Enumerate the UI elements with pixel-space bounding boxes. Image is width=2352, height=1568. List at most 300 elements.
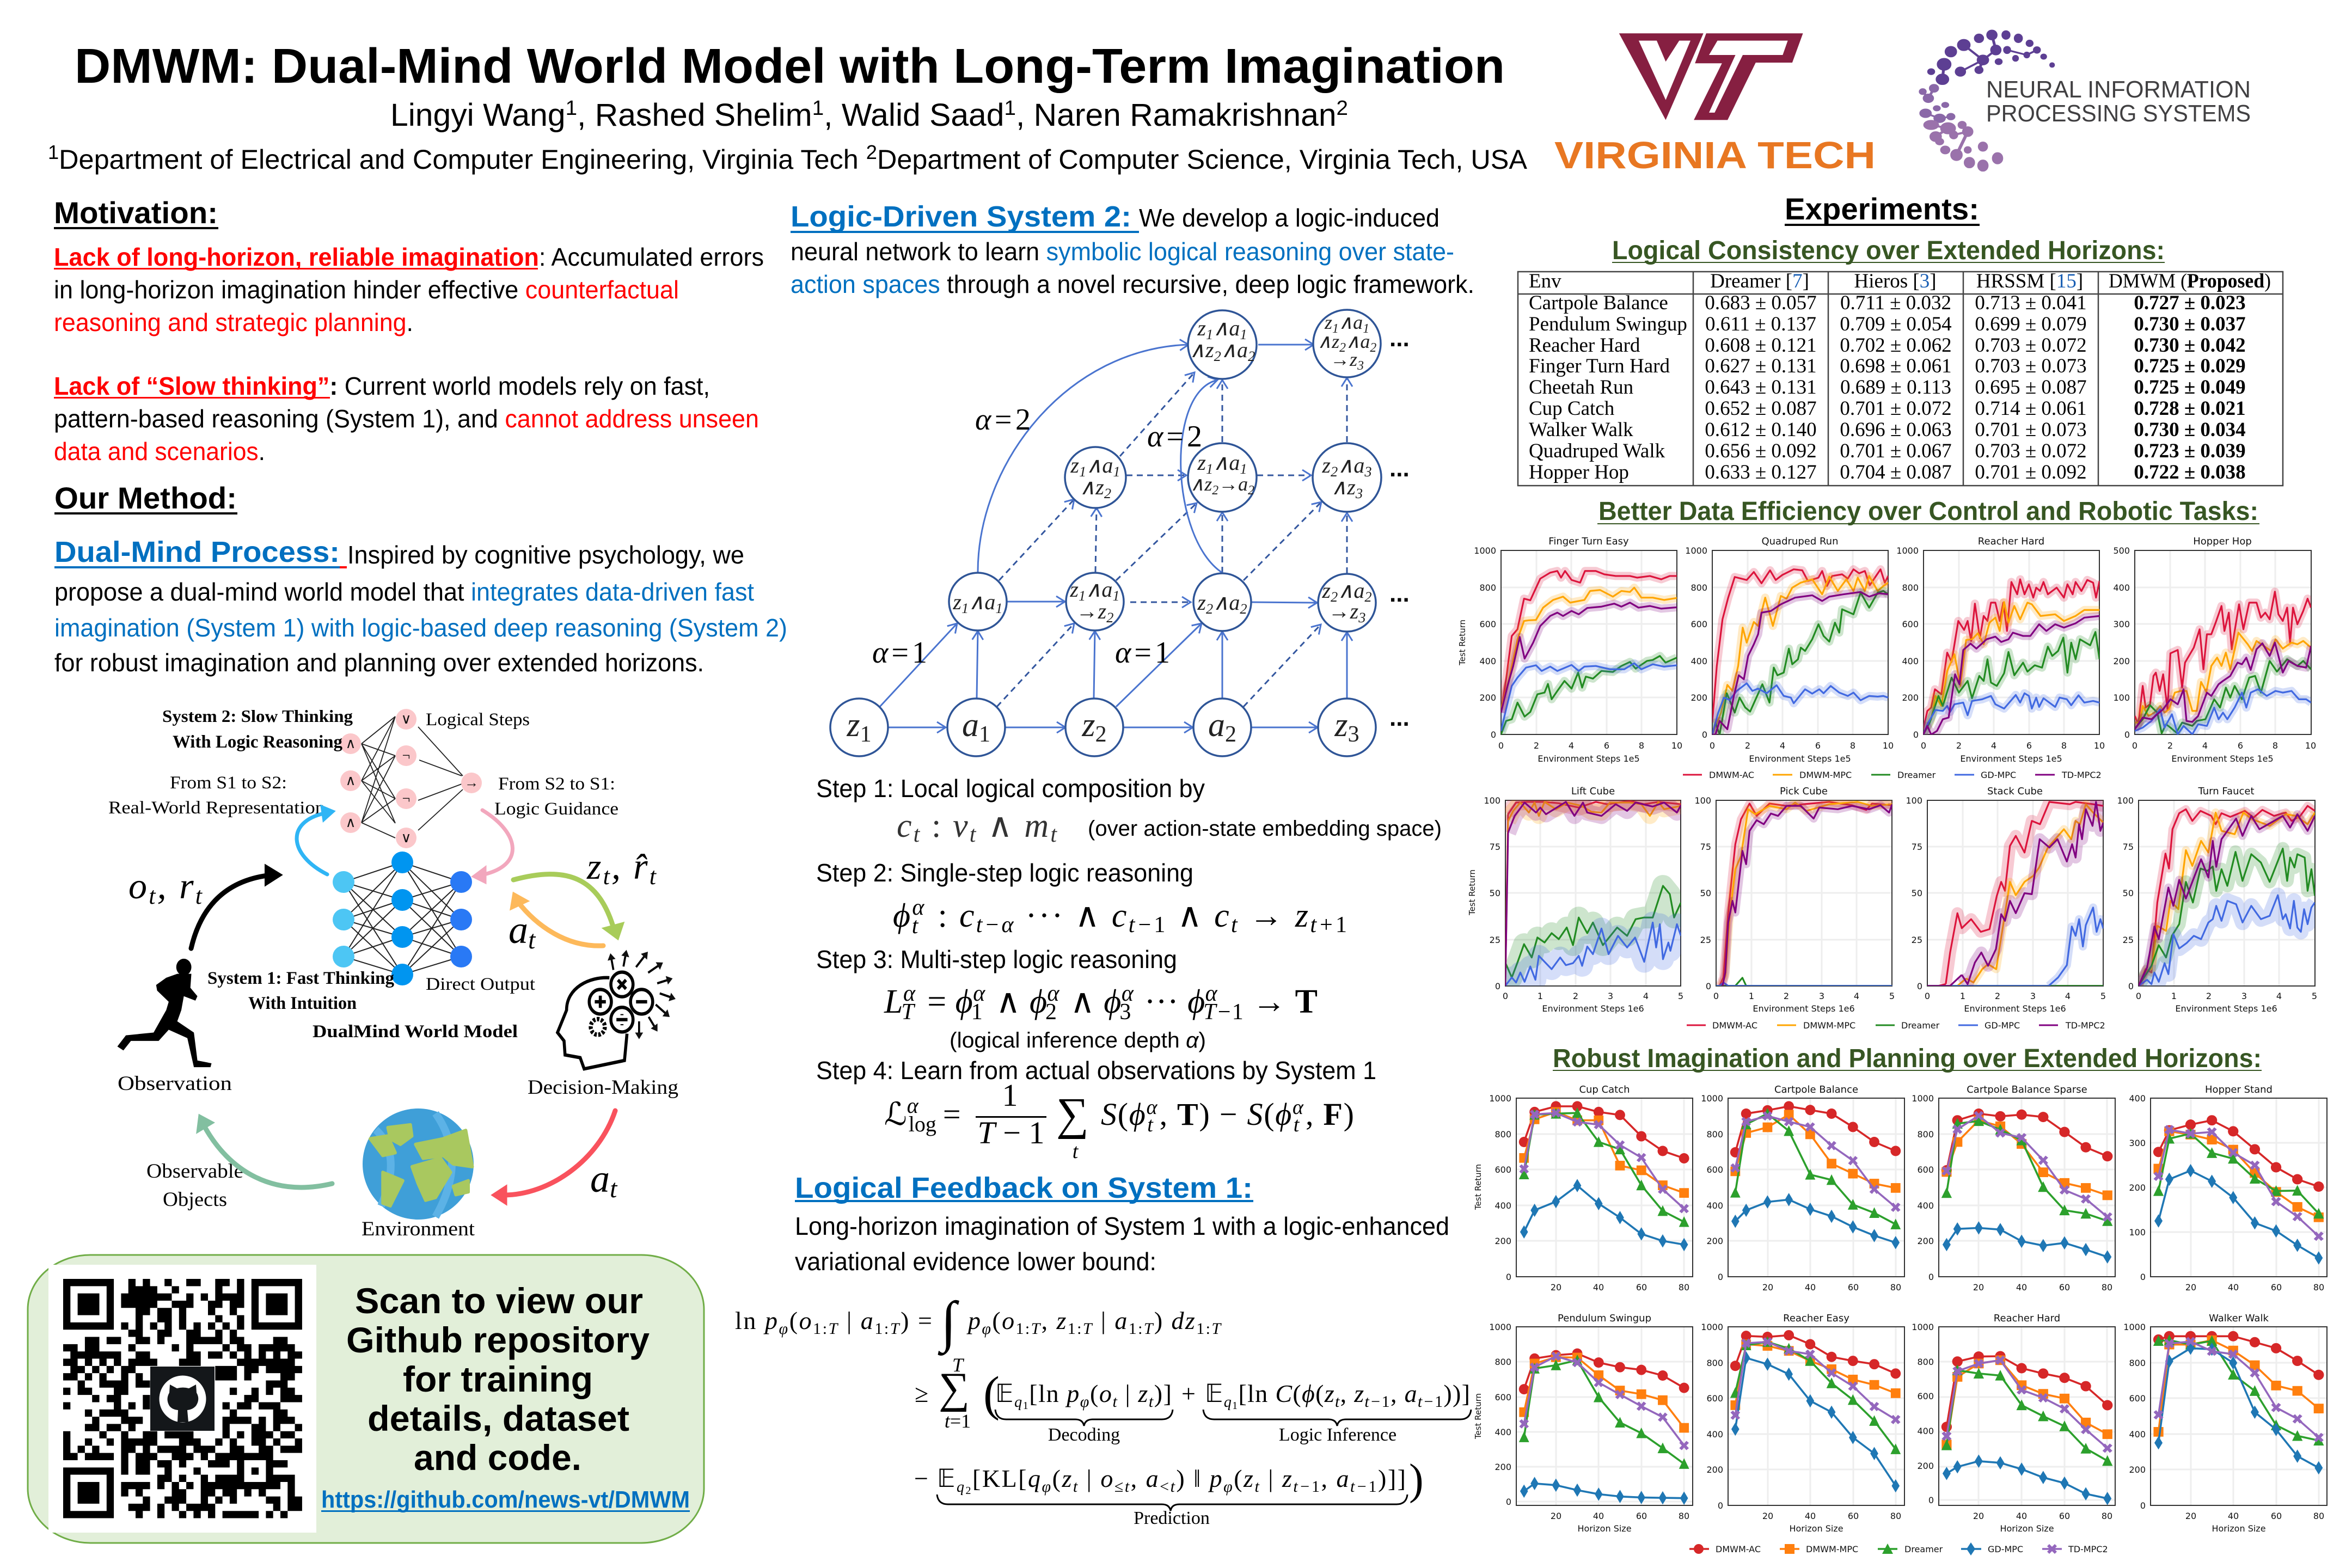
table: logical consistency results: Cheetah Run [1529,376,1633,399]
step 2: 1 [1154,912,1165,938]
step 2: 1 [1336,912,1347,938]
formula: evidence lower bound: | [1079,1465,1099,1492]
table: logical consistency results: 0.722 ± 0.038 [2134,461,2246,483]
chart: Pendulum Swingup: 60 [1636,1511,1647,1521]
chart: Cartpole Balance: 400 [1706,1200,1723,1211]
node labels: z [1322,453,1331,477]
chart: Cup Catch: Cup Catch [1579,1084,1630,1095]
chart: Pick Cube: 4 [1854,991,1859,1001]
chart: Walker Walk: 40 [2228,1511,2239,1521]
formula: evidence lower bound: 1:T [874,1320,899,1338]
table: logical consistency results: 0.723 ± 0.039 [2134,440,2246,462]
formula: evidence lower bound: ( [1090,1380,1098,1407]
authors: 1 [566,97,577,120]
chart: Lift Cube: 25 [1490,935,1500,945]
table: logical consistency results: 0.730 ± 0.034 [2134,419,2246,441]
step 3: ··· [1136,983,1187,1020]
chart: Reacher Easy: Horizon Size [1789,1523,1843,1534]
formula: evidence lower bound: , [1340,1380,1353,1407]
legend: data efficiency, row 2: GD-MPC [1984,1020,2020,1031]
chart: Reacher Easy: 60 [1848,1511,1859,1521]
legend: data efficiency, row 2: DMWM-MPC [1803,1020,1855,1031]
formula: evidence lower bound: ( [1052,1465,1061,1492]
step 1: c [897,807,912,844]
chart: Cartpole Balance: 200 [1706,1236,1723,1246]
chart: Cup Catch: 1000 [1489,1093,1511,1104]
formula: evidence lower bound: q [1224,1394,1232,1411]
legend: horizon charts [1689,1542,2108,1555]
chart: Stack Cube: 0 [1925,991,1930,1001]
formula: evidence lower bound: z [1243,1465,1253,1492]
step 2: t−α [976,912,1014,938]
text block: lack of slow thinking: pattern-based reasoning (System 1), and cannot address unseen [54,405,759,433]
chart: Cartpole Balance Sparse: 40 [2016,1282,2027,1293]
diagram labels: DualMind World Model [313,1022,518,1042]
chart: Reacher Hard (data efficiency): 200 [1902,693,1919,703]
logic network: ¬ [402,791,410,806]
logic network [340,709,482,848]
legend: data efficiency, row 1: GD-MPC [1981,770,2016,780]
callout text: Scan to view our [355,1281,643,1321]
formula: evidence lower bound: [KL[ [972,1465,1027,1492]
node labels: 2 [1331,463,1338,480]
chart: Cartpole Balance Sparse: 80 [2102,1282,2112,1293]
chart: Hopper Hop: 100 [2113,693,2130,703]
heading: Experiments: Experiments: [1785,192,1979,226]
node labels: →a [1218,473,1248,495]
diagram: dual-mind world model loop [108,706,678,1240]
node labels: 2 [1364,589,1372,605]
chart: Stack Cube: Environment Steps 1e6 [1964,1003,2066,1014]
logo: Virginia Tech: VIRGINIA TECH [1554,134,1876,176]
chart: Finger Turn Easy [1474,536,1682,764]
chart: Cartpole Balance Sparse: 60 [2059,1282,2070,1293]
legend: horizon charts: DMWM-AC [1716,1544,1761,1554]
table: logical consistency results: 0.730 ± 0.042 [2134,334,2246,357]
step 3: T [901,1000,915,1025]
chart: Stack Cube: 100 [1906,795,1922,806]
chart: Finger Turn Easy: 1000 [1474,546,1496,556]
text block: feedback description [795,1212,1449,1276]
chart: Reacher Hard (horizon): 1000 [1912,1322,1934,1332]
chart: Quadruped Run: 10 [1883,740,1894,751]
formula: evidence lower bound: t− [1364,1393,1381,1411]
alpha labels: α=1 [1115,636,1170,670]
chart: Reacher Easy: 20 [1762,1511,1773,1521]
step 4: t [1294,1113,1300,1136]
node labels: ∧z [1190,473,1212,495]
chart: Quadruped Run: 4 [1780,740,1785,751]
heading: Robust Imagination: Robust Imagination and Planning over Extended Horizons: [1553,1044,2262,1073]
chart: Pick Cube [1694,786,1895,1014]
table: logical consistency results: Finger Turn Hard [1529,355,1670,377]
authors: 1 [1004,97,1016,120]
chart: Reacher Hard (horizon): Reacher Hard [1994,1313,2060,1324]
chart: Pick Cube: 1 [1749,991,1754,1001]
diagram labels: Observable [146,1160,243,1183]
text block: lack of slow thinking: data and scenarios. [54,437,265,465]
step 2: ϕ [893,897,910,934]
formula: evidence lower bound: ln p [735,1307,777,1334]
chart: Reacher Hard (horizon) [1912,1313,2115,1534]
chart: Pick Cube: 75 [1700,842,1711,852]
chart: Hopper Hop: 10 [2305,740,2316,751]
chart: Cup Catch: 20 [1551,1282,1561,1293]
formula: evidence lower bound: dz [1172,1307,1195,1334]
node labels: 1 [979,722,990,747]
text block: feedback description: Long-horizon imagination of System 1 with a logic-enhanced [795,1212,1449,1240]
chart: Stack Cube: 3 [2030,991,2036,1001]
math labels: , r [157,865,194,906]
chart: Reacher Hard (horizon): 60 [2059,1511,2070,1521]
formula: evidence lower bound: 1:T [813,1320,837,1338]
node labels: 3 [1355,485,1363,501]
table: logical consistency results: 0.699 ± 0.079 [1975,313,2087,335]
chart: Quadruped Run: 6 [1815,740,1821,751]
chart: Hopper Stand: 60 [2271,1282,2282,1293]
text block: dual-mind description: Inspired by cognitive psychology, we [347,541,744,569]
chart: Pendulum Swingup: 40 [1593,1511,1604,1521]
node labels: ∧a [1213,590,1240,615]
chart: Hopper Stand: Hopper Stand [2205,1084,2273,1095]
icon: GitHub logo [150,1367,215,1431]
formula: evidence lower bound: )]] [1378,1465,1406,1492]
node labels: 1 [860,722,872,747]
step 1: t [1050,822,1057,847]
step 3: α [1205,981,1218,1006]
chart: Finger Turn Easy: 200 [1479,693,1496,703]
formula: evidence lower bound: a [1146,1465,1159,1492]
chart: Stack Cube [1906,786,2106,1014]
step 4: log [909,1112,936,1136]
chart: Quadruped Run: 400 [1690,656,1707,666]
graph nodes [830,310,1381,756]
icon: globe [363,1108,474,1220]
panel: logic-driven system 2 [735,200,1474,1528]
node labels: z [1197,450,1206,475]
table: logical consistency results: 0.695 ± 0.087 [1975,376,2087,399]
node labels: 3 [1348,722,1359,747]
chart: Reacher Hard (horizon): 400 [1917,1426,1934,1436]
node labels: 2 [1240,601,1247,617]
chart: Reacher Hard (data efficiency): 0 [1913,730,1919,740]
formula: evidence lower bound: ))] [1443,1380,1470,1407]
callout text: for training [403,1359,593,1399]
formula: evidence lower bound: z [1056,1307,1066,1334]
chart: Reacher Easy: Reacher Easy [1783,1313,1849,1324]
chart: Hopper Stand: 80 [2313,1282,2324,1293]
chart: Cup Catch: 80 [1679,1282,1689,1293]
chart: Stack Cube: 5 [2100,991,2106,1001]
legend: horizon charts: GD-MPC [1988,1544,2023,1554]
chart: Lift Cube: 100 [1484,795,1500,806]
step 4: ℒ [884,1097,907,1132]
node labels: 1 [1240,326,1247,342]
chart: Pendulum Swingup: 80 [1679,1511,1689,1521]
node labels: 1 [961,600,969,616]
step 3: = [918,983,955,1020]
chart: Cartpole Balance [1701,1084,1904,1293]
chart: Walker Walk: 800 [2129,1358,2146,1368]
callout text: details, dataset [367,1398,629,1438]
node labels: ∧a [1213,450,1240,475]
chart: Quadruped Run: 2 [1745,740,1750,751]
logo: Neural Information Processing Systems: NEURAL INFORMATION [1986,76,2251,103]
chart: Pendulum Swingup: 20 [1551,1511,1561,1521]
chart: Walker Walk: 600 [2129,1393,2146,1404]
step 2: → [1239,897,1294,934]
authors: Lingyi Wang [390,97,563,133]
text block: lack of slow thinking: Lack of “Slow thinking”: Current world models rely on fast, [54,372,710,400]
formula: evidence lower bound: 𝔼 [937,1465,955,1492]
formula: evidence lower bound: q [1028,1465,1040,1492]
legend: data efficiency, row 1: Dreamer [1897,770,1936,780]
chart: Walker Walk: 60 [2271,1511,2282,1521]
chart: Hopper Hop: 2 [2167,740,2173,751]
formula: evidence lower bound: , [1391,1380,1404,1407]
node labels: ∧a [1213,316,1240,340]
chart: Reacher Easy: 400 [1706,1429,1723,1440]
chart: Stack Cube: 75 [1912,842,1922,852]
chart: Finger Turn Easy: 800 [1479,583,1496,593]
formula: evidence lower bound: ≥ [915,1380,928,1407]
formula: evidence lower bound: , [1321,1465,1335,1492]
step 4: 1 [1002,1077,1018,1113]
node labels: 1 [1112,587,1120,604]
chart: Lift Cube: 0 [1503,991,1508,1001]
ellipsis markers: ... [1389,325,1410,352]
step 4: α [1293,1096,1304,1119]
logic network: ∧ [345,773,356,788]
diagram labels: Logical Steps [426,710,530,730]
text block: dual-mind description [54,541,787,677]
panel: our method [54,481,787,677]
chart: Lift Cube: 5 [1678,991,1683,1001]
chart: Pick Cube: 0 [1713,991,1719,1001]
step 4: α [907,1093,919,1118]
node labels: ∧a [1346,330,1370,352]
node labels: 2 [1248,348,1255,364]
formula: evidence lower bound: | [1260,1465,1281,1492]
chart: Cartpole Balance: 0 [1718,1272,1723,1282]
node labels: 1 [1113,463,1120,480]
chart: Hopper Hop: 6 [2238,740,2243,751]
chart: Reacher Easy: 40 [1805,1511,1816,1521]
table: logical consistency results: 0.704 ± 0.087 [1840,461,1952,483]
node labels: z [953,590,961,614]
axis label: test return, row 2: Test Return [1467,869,1477,916]
step 2: c [959,897,974,934]
node labels: ∧a [1338,578,1364,603]
chart: Pick Cube: 0 [1706,981,1711,991]
logic network: ∧ [345,814,356,830]
chart: Hopper Stand: 40 [2228,1282,2239,1293]
title: DMWM: Dual-Mind World Model with Long-Term Imagination [75,39,1505,94]
chart: Pendulum Swingup: 400 [1494,1427,1511,1437]
chart: Cartpole Balance: 80 [1890,1282,1901,1293]
formula: evidence lower bound: )] [1154,1380,1172,1407]
chart: Pendulum Swingup: Horizon Size [1577,1523,1632,1534]
diagram labels: With Intuition [248,994,357,1013]
node labels: 3 [1357,359,1364,373]
formula: evidence lower bound: [ln [1029,1380,1066,1407]
table: logical consistency results: 0.713 ± 0.041 [1975,292,2087,314]
chart: Stack Cube: Stack Cube [1987,786,2043,797]
chart: Turn Faucet: 1 [2171,991,2177,1001]
chart: Reacher Hard (data efficiency): 4 [1991,740,1996,751]
chart: Stack Cube: 0 [1917,981,1922,991]
node labels: →z [1076,599,1106,623]
chart: Reacher Hard (horizon): 40 [2016,1511,2027,1521]
callout text: Github repository [346,1320,650,1360]
chart: Reacher Hard (data efficiency): 10 [2094,740,2105,751]
math labels: a [590,1157,610,1200]
chart: Stack Cube: 4 [2065,991,2071,1001]
diagram labels: Environment [362,1218,475,1240]
step 2: t− [1129,912,1152,938]
node labels: ∧z [1318,330,1339,352]
table: logical consistency results: 0.727 ± 0.023 [2134,292,2246,314]
chart: Turn Faucet: 2 [2206,991,2212,1001]
diagram labels: System 2: Slow Thinking [162,706,353,726]
chart: Lift Cube: 75 [1490,842,1500,852]
legend: horizon charts: Dreamer [1904,1544,1943,1554]
formula: evidence lower bound: ( [1234,1465,1242,1492]
chart: Cartpole Balance: Cartpole Balance [1774,1084,1858,1095]
table: logical consistency results: 0.702 ± 0.062 [1840,334,1952,357]
node labels: 1 [1206,461,1213,477]
table: logical consistency results: HRSSM [15] [1976,270,2083,292]
step 1: : [921,807,951,844]
chart: Cartpole Balance: 40 [1805,1282,1816,1293]
ellipsis markers: ... [1389,580,1410,607]
math labels [128,846,657,1203]
table: logical consistency results: 0.689 ± 0.113 [1840,376,1951,399]
node labels: ∧a [969,590,995,614]
chart: Quadruped Run [1685,536,1894,764]
logic network: → [464,775,479,791]
chart: Quadruped Run: 1000 [1685,546,1707,556]
legend: data efficiency, row 1: DMWM-MPC [1799,770,1852,780]
math labels: a [509,908,528,952]
step 2: c [1112,897,1126,934]
formula: evidence lower bound: φ [1042,1478,1051,1496]
heading: Logical Feedback on System 1: Logical Feedback on System 1: [795,1172,1253,1204]
chart: Hopper Hop [2113,536,2316,764]
chart: Hopper Hop: 0 [2124,730,2130,740]
formula: evidence lower bound: q [1014,1394,1022,1411]
formula: evidence lower bound: Logic Inference [1279,1425,1396,1445]
node labels: 2 [1331,589,1338,605]
chart: Hopper Hop: 200 [2113,656,2130,666]
table: logical consistency results: Cup Catch [1529,397,1615,420]
alpha labels: α=2 [975,403,1031,437]
icon: runner [118,959,211,1067]
step 2: α [912,895,924,920]
node labels: 1 [1363,322,1369,336]
formula: evidence lower bound: o [1099,1380,1112,1407]
node labels: ∧a [1338,453,1364,477]
chart: Stack Cube: 1 [1960,991,1965,1001]
table: logical consistency results: Walker Walk [1529,419,1633,441]
QR code [48,1265,316,1533]
chart: Walker Walk: Horizon Size [2212,1523,2266,1534]
chart: Reacher Easy: 0 [1718,1500,1723,1511]
step 4: t [1147,1113,1154,1136]
legend: data efficiency, row 1: DMWM-AC [1709,770,1754,780]
callout text: and code. [414,1437,581,1478]
formula: evidence lower bound: 1 [1232,1400,1238,1412]
formula: evidence lower bound: z [1061,1465,1071,1492]
chart: Lift Cube: 3 [1608,991,1613,1001]
formula: evidence lower bound: t [1149,1393,1154,1411]
node labels [846,311,1376,747]
node labels: z [1322,578,1331,603]
node labels: →z [1328,599,1358,623]
table: logical consistency results: 0.701 ± 0.073 [1975,419,2087,441]
chart: Reacher Easy: 600 [1706,1393,1723,1404]
text block: system 2 description [791,204,1474,298]
chart: Reacher Hard (horizon): 200 [1917,1461,1934,1471]
chart: Hopper Hop: 4 [2202,740,2208,751]
authors: , Rashed Shelim [577,97,812,133]
step 4: α [1147,1096,1158,1119]
alpha labels: α=1 [872,636,927,670]
authors: 1 [812,97,824,120]
text block: dual-mind description: for robust imagination and planning over extended horizons. [54,648,704,677]
diagram labels: From S2 to S1: [498,774,615,794]
text block: system 2 description: action spaces through a novel recursive, deep logic framework. [791,270,1474,298]
formula: evidence lower bound: a [1114,1307,1127,1334]
formula: evidence lower bound: C(ϕ(z [1275,1380,1334,1407]
formula: evidence lower bound: ) [1154,1307,1170,1334]
chart: Reacher Easy [1701,1313,1904,1534]
authors: , Naren Ramakrishnan [1016,97,1337,133]
node labels: 1 [1079,463,1086,480]
formula: evidence lower bound: ∑ [939,1364,970,1412]
icon: head with math operators [558,955,671,1069]
node labels: 3 [1358,609,1365,626]
step 3: α [903,981,916,1006]
logic network: ¬ [402,748,410,763]
table: logical consistency results: 0.703 ± 0.072 [1975,440,2087,462]
chart: Finger Turn Easy: 600 [1479,619,1496,629]
table: logical consistency results: 0.696 ± 0.063 [1840,419,1952,441]
chart: Quadruped Run: Environment Steps 1e5 [1749,754,1851,764]
chart: Cartpole Balance Sparse: Cartpole Balance Sparse [1967,1084,2087,1095]
graph edges [880,345,1347,727]
node labels: 2 [1339,341,1346,355]
chart: Finger Turn Easy: 4 [1569,740,1574,751]
step 1: m [1024,807,1049,844]
text block: lack of long-horizon imagination [54,243,764,336]
table: logical consistency results [1518,270,2283,486]
chart: Turn Faucet: 5 [2312,991,2317,1001]
formula: evidence lower bound: ) ‖ [1176,1465,1208,1492]
chart: Hopper Hop: 0 [2132,740,2137,751]
step 3: ϕ [1187,983,1205,1020]
formula: evidence lower bound: − [914,1465,928,1492]
table: logical consistency results: 0.703 ± 0.073 [1975,355,2087,377]
chart: Lift Cube: 2 [1573,991,1578,1001]
formula: evidence lower bound: t [1254,1478,1259,1496]
chart: Cartpole Balance Sparse [1912,1084,2115,1293]
logic network: ∨ [401,830,412,846]
formula: evidence lower bound: t− [1350,1478,1367,1496]
step 1 [816,774,1442,847]
chart: Reacher Hard (horizon): Horizon Size [2000,1523,2054,1534]
step 2: ∧ [1167,897,1212,934]
